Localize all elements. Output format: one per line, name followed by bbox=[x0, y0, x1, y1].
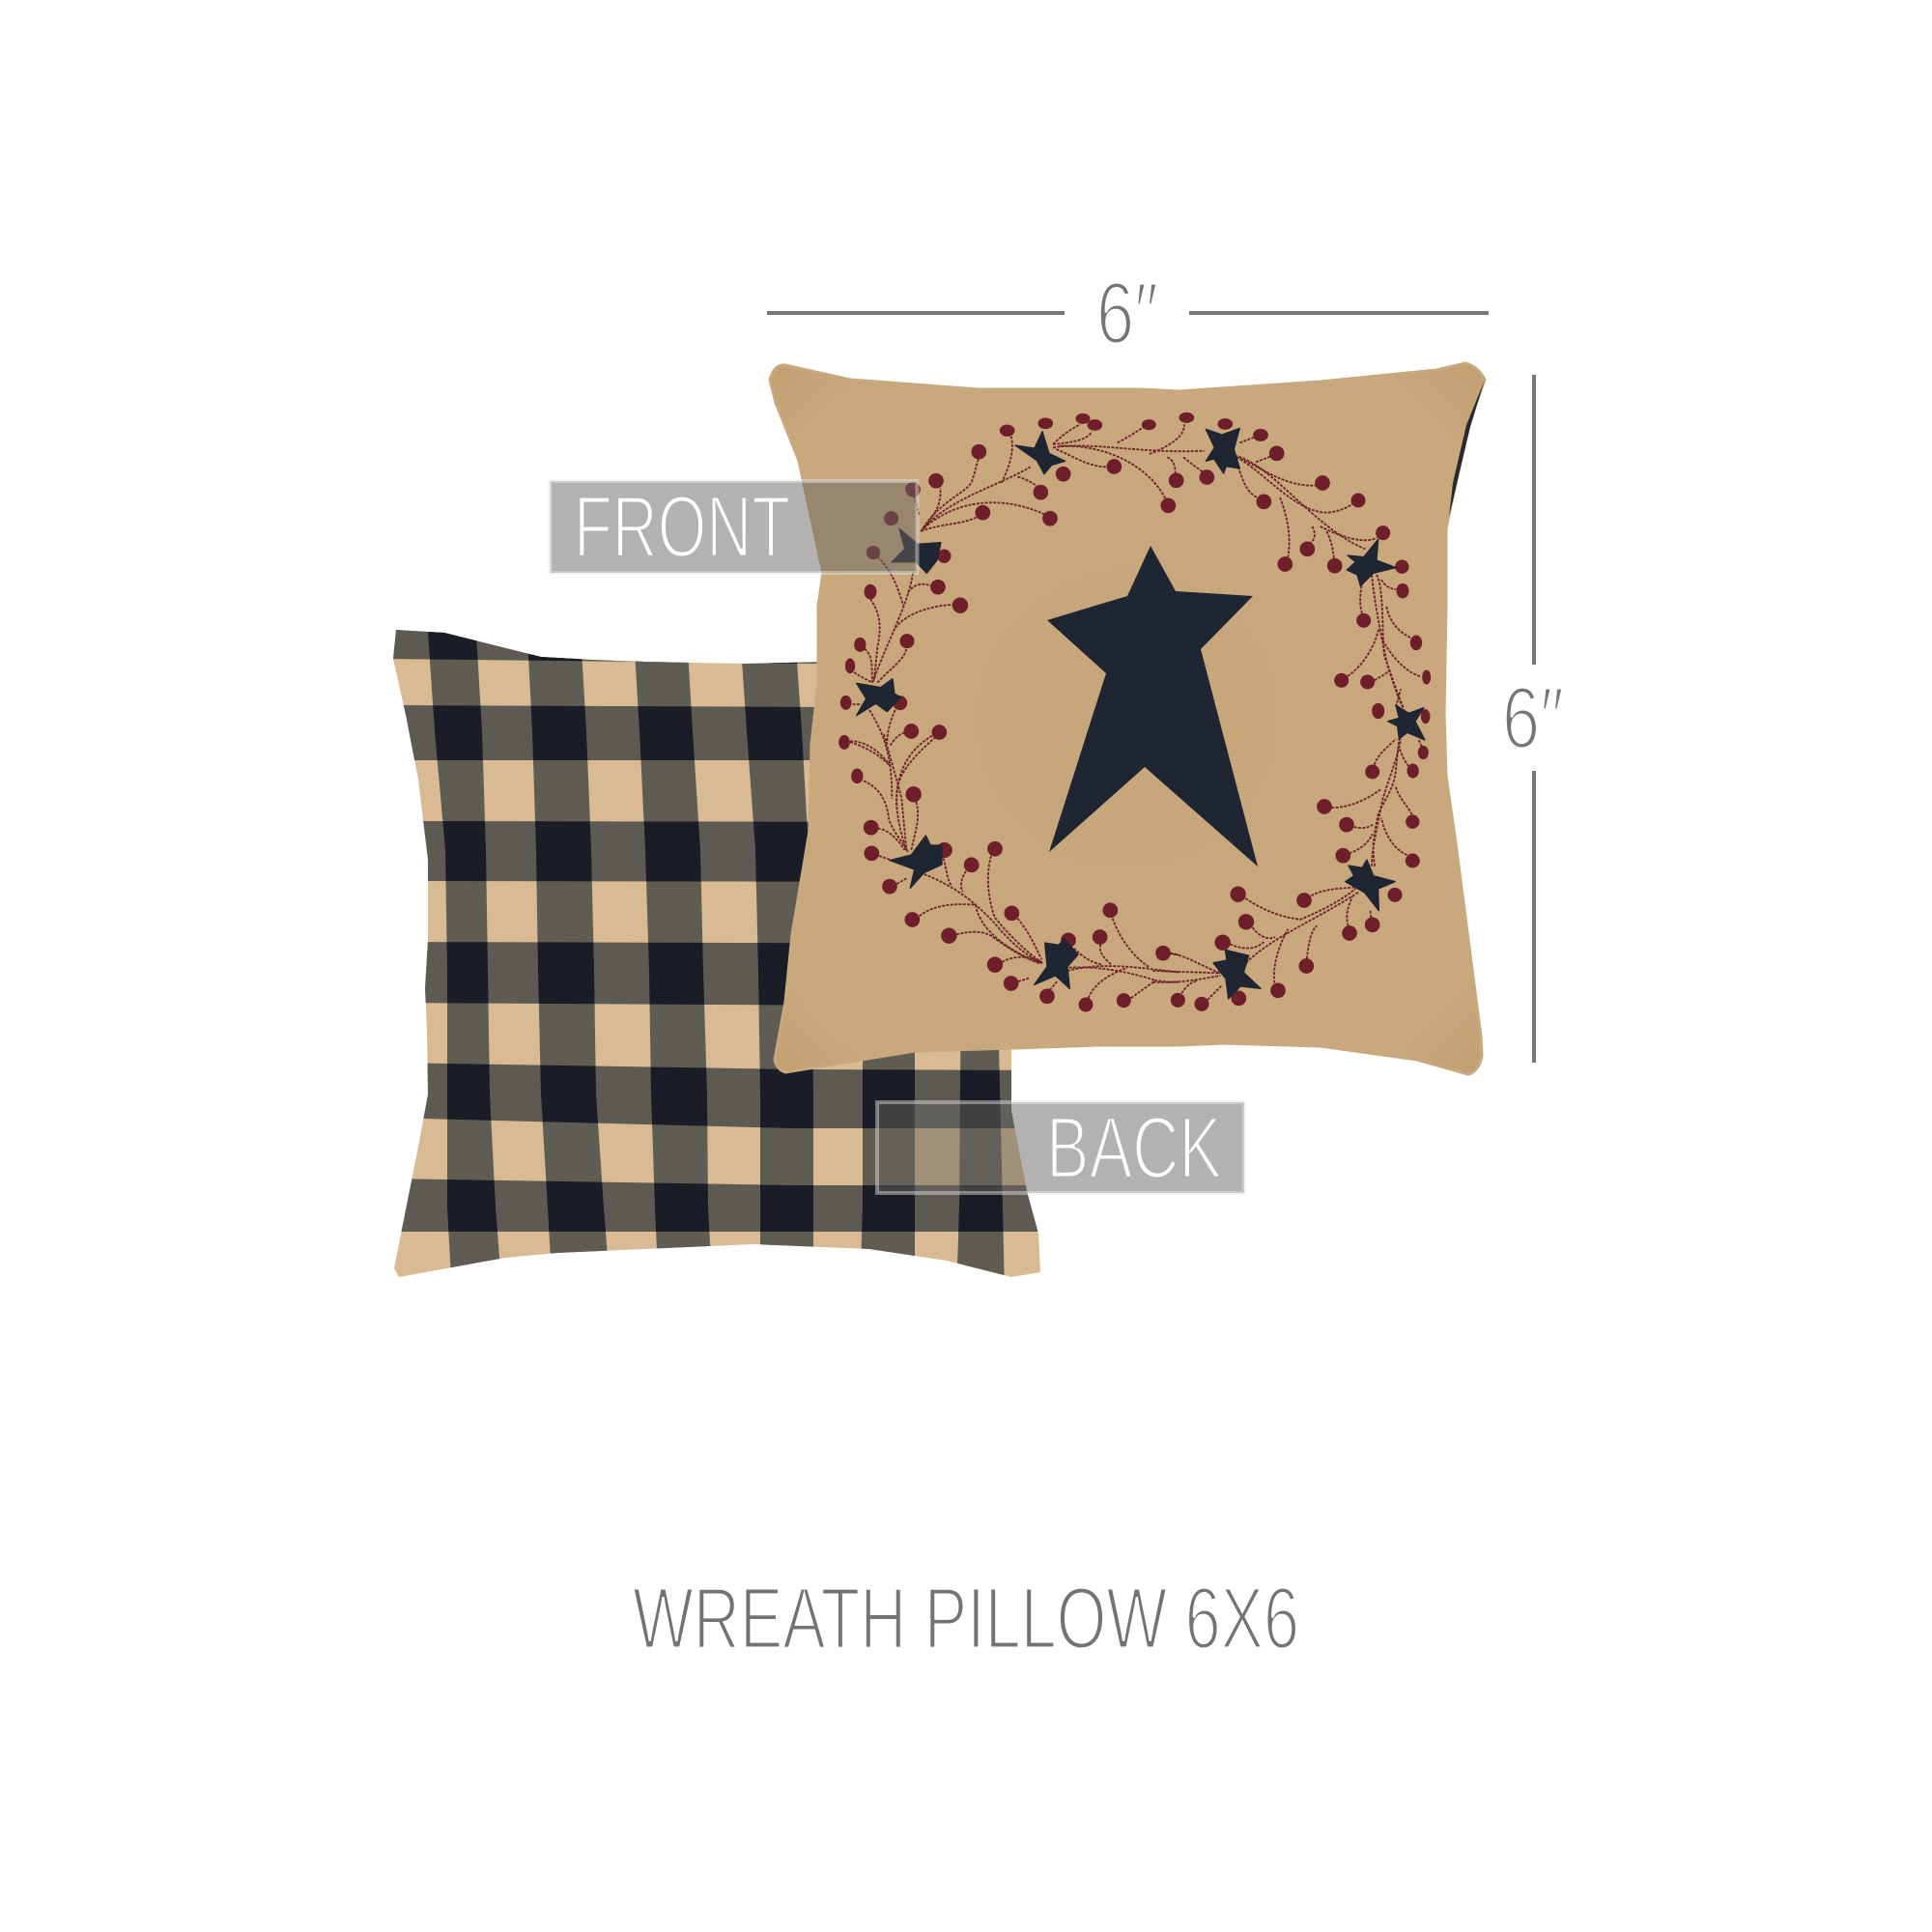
pillow: front (tan with star wreath) bbox=[770, 363, 1485, 1074]
width value: 6″ bbox=[1096, 266, 1158, 362]
pillow: back (buffalo check) bbox=[386, 618, 1063, 1294]
primitive star bbox=[1047, 546, 1258, 867]
width dimension bbox=[767, 266, 1489, 362]
front label text: FRONT bbox=[574, 479, 790, 576]
wreath: upper left bbox=[839, 413, 1205, 809]
back label text: BACK bbox=[1046, 1100, 1222, 1197]
label: back bbox=[877, 1100, 1244, 1197]
wreath: lower left bbox=[850, 734, 1179, 1011]
fabric body bbox=[770, 363, 1485, 1074]
height value: 6″ bbox=[1502, 670, 1564, 767]
product infographic bbox=[393, 284, 1561, 1648]
berry wreath bbox=[839, 412, 1431, 1011]
label: front bbox=[551, 479, 918, 576]
wreath: lower right bbox=[1152, 689, 1430, 1010]
title: WREATH PILLOW 6X6 bbox=[633, 1571, 1299, 1667]
wreath: upper right bbox=[1161, 412, 1431, 708]
height dimension bbox=[1502, 375, 1564, 1063]
dark seam on right edge bbox=[1449, 380, 1485, 517]
